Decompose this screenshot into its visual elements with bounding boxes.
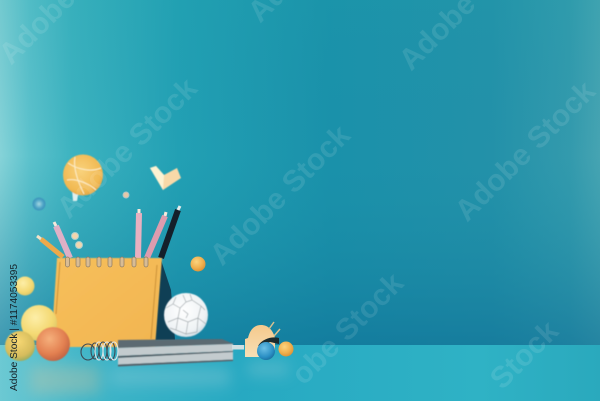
spheres group — [5, 276, 70, 361]
icon: book spiral — [81, 342, 118, 360]
watermarks: Adobe Stock — [204, 119, 357, 272]
small grey stub — [232, 345, 244, 350]
watermarks: Stock — [484, 314, 565, 396]
icon: small blue ball — [32, 198, 46, 210]
pencil: black — [161, 206, 180, 258]
stacked books — [118, 339, 234, 366]
notebook spiral rings — [66, 257, 148, 267]
watermarks: Adobe Stock — [51, 72, 204, 225]
icon: small bead — [123, 192, 129, 198]
icon: dark cap — [258, 337, 279, 346]
icon: small orange ball — [190, 256, 206, 272]
pencils — [37, 206, 180, 258]
icon: check mark — [150, 166, 181, 190]
icon: orange-red sphere — [36, 327, 70, 361]
icon: floating beads — [72, 232, 82, 248]
icon: yellow-green sphere — [5, 331, 35, 361]
object shadows and floor reflections — [30, 362, 288, 394]
watermarks: Adobe Stock — [449, 75, 600, 228]
pencil: pink left — [54, 222, 70, 258]
icon: yellow sphere small — [16, 276, 34, 296]
pencil: orange — [37, 236, 63, 257]
icon: peach arch — [245, 325, 275, 357]
pencil: pink centre — [138, 209, 139, 258]
watermarks: obe Stock — [285, 266, 410, 391]
icon: large orange ball with stem — [63, 154, 103, 201]
floor — [0, 345, 600, 401]
pencil: pink right — [147, 212, 166, 258]
notebook: orange cover — [51, 258, 162, 347]
desk toy cluster — [232, 322, 294, 360]
icon: blue ball — [257, 342, 275, 360]
notebook back stand — [155, 260, 175, 340]
stock id label: Adobe Stock | #1174053395 — [8, 264, 20, 391]
icon: orange ball — [278, 342, 294, 356]
icon: white globe — [164, 293, 208, 337]
icon: sticks — [269, 322, 280, 336]
icon: pale yellow sphere — [21, 305, 57, 341]
